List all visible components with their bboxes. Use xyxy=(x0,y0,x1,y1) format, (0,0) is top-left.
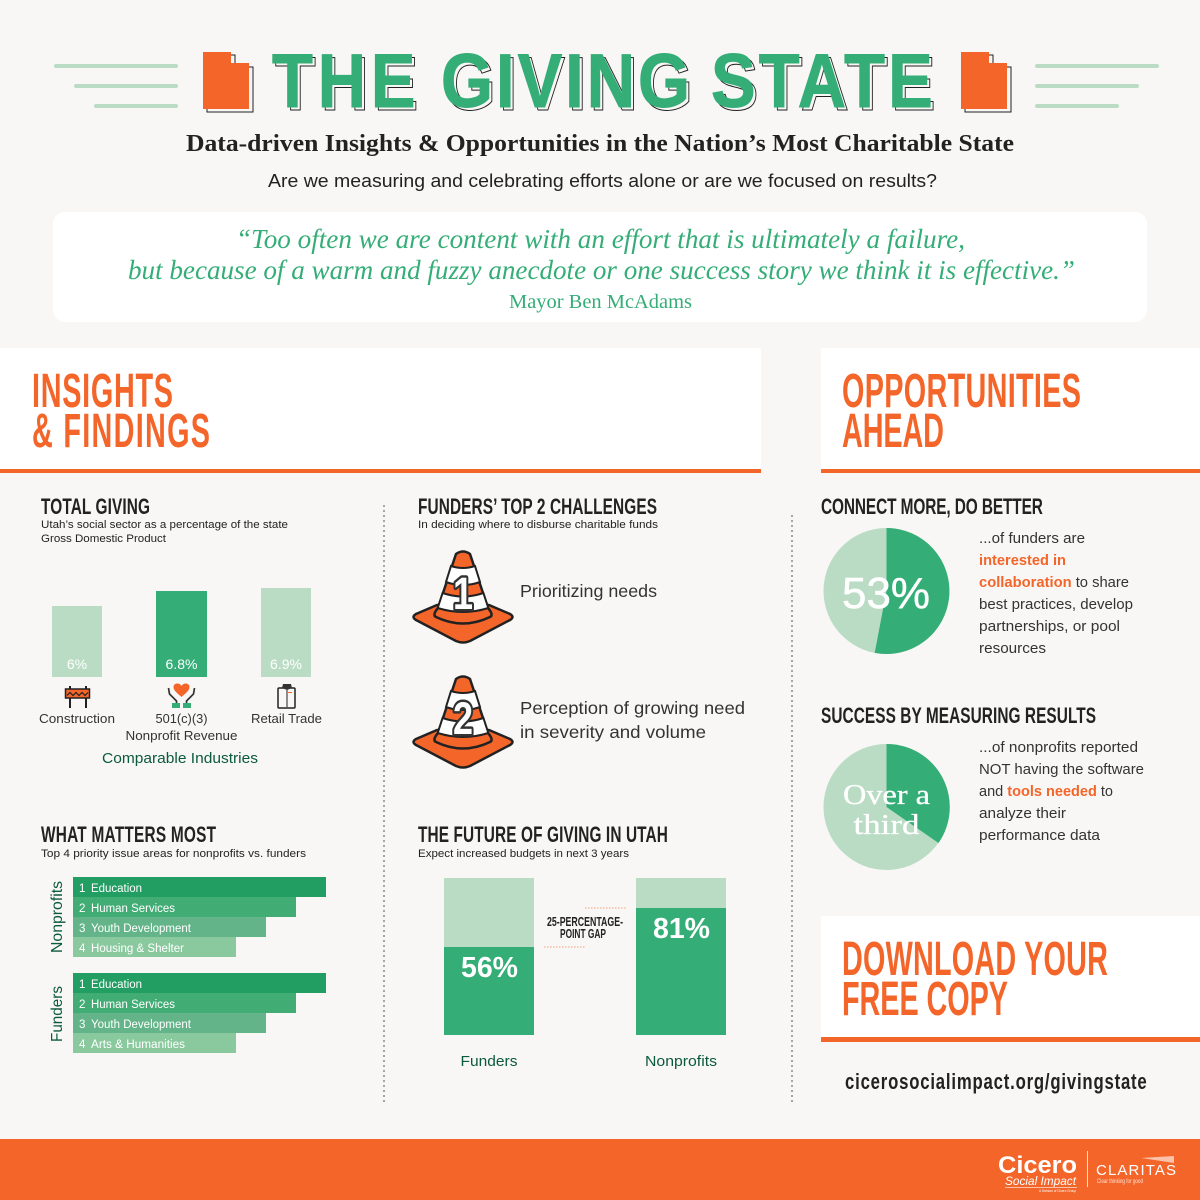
ranked bars: funders: 4 xyxy=(79,1039,86,1051)
icon: traffic cone 2 xyxy=(414,676,512,768)
logo: Claritas: CLARITAS xyxy=(1096,1162,1176,1179)
callout: percentage point gap: POINT GAP xyxy=(560,926,606,941)
icon: Utah state left xyxy=(203,52,253,112)
rotated label: funders: Funders xyxy=(49,986,66,1042)
panel: insights heading xyxy=(0,348,761,473)
panel: download xyxy=(821,916,1200,1095)
bar chart: 6.9% xyxy=(270,656,302,672)
ranked bars: nonprofits xyxy=(73,877,326,957)
heading: download your free copy xyxy=(842,933,1108,1026)
axis labels: Retail Trade xyxy=(251,711,322,726)
ranked bars: nonprofits: 2 xyxy=(79,903,85,915)
title: GIVING xyxy=(441,39,690,124)
ranked bars: funders: Education xyxy=(91,979,142,991)
logo: Cicero Social Impact xyxy=(998,1152,1077,1193)
stacked bar: nonprofits xyxy=(636,878,726,1035)
ranked bars: funders xyxy=(73,973,326,1053)
stacked bar: funders xyxy=(444,878,534,1035)
ranked bars: nonprofits: 4 xyxy=(79,943,86,955)
description text: best practices, develop xyxy=(979,596,1133,613)
axis labels: 501(c)(3) xyxy=(156,711,208,726)
heading: opportunities ahead: AHEAD xyxy=(842,405,944,458)
panel: future of giving xyxy=(418,823,726,1070)
ranked bars: funders: 2 xyxy=(79,999,85,1011)
heading: what matters most: WHAT MATTERS MOST xyxy=(41,823,216,848)
ranked bars: nonprofits: Human Services xyxy=(91,903,175,915)
panel: quote xyxy=(53,212,1147,322)
heading: future of giving: THE FUTURE OF GIVING IN UTAH xyxy=(418,823,668,848)
description text: resources xyxy=(979,640,1046,657)
icon: traffic cone 1: 1 xyxy=(453,568,473,619)
callout: percentage point gap xyxy=(544,908,627,947)
panel: funders' top 2 challenges xyxy=(414,495,745,768)
heading: success: SUCCESS BY MEASURING RESULTS xyxy=(821,704,1096,729)
title: THE xyxy=(275,42,418,127)
bar chart xyxy=(52,588,311,677)
pie chart: over a third: third xyxy=(854,809,920,841)
heading: download your free copy: FREE COPY xyxy=(842,973,1008,1026)
challenge 2 text: in severity and volume xyxy=(520,722,706,742)
header xyxy=(54,39,1159,191)
quote text xyxy=(128,224,1075,285)
heading: insights and findings: & FINDINGS xyxy=(32,405,210,458)
description text: ...of nonprofits reported xyxy=(979,739,1138,756)
stacked bar: nonprofits: 81% xyxy=(653,913,710,945)
description text: and tools needed to xyxy=(979,783,1113,800)
description: Utah’s social sector as a percentage of the state xyxy=(41,519,288,531)
heading: challenges: FUNDERS’ TOP 2 CHALLENGES xyxy=(418,495,657,520)
rotated label: nonprofits: Nonprofits xyxy=(49,881,66,953)
decorative speed lines right xyxy=(1035,64,1159,108)
challenge 2 text xyxy=(520,698,745,742)
bar labels: Funders xyxy=(460,1053,518,1070)
ranked bars: nonprofits: 1 xyxy=(79,883,85,895)
quote attribution: Mayor Ben McAdams xyxy=(509,291,692,313)
heading: opportunities ahead xyxy=(842,365,1081,458)
heading: opportunities ahead: OPPORTUNITIES xyxy=(842,365,1081,418)
ranked bars: funders: Human Services xyxy=(91,999,175,1011)
callout: percentage point gap: 25-PERCENTAGE- xyxy=(547,914,623,929)
ranked bars: funders: 1 xyxy=(79,979,85,991)
description text: performance data xyxy=(979,827,1101,844)
title: THE xyxy=(272,39,415,124)
logo: Cicero Social Impact: Cicero xyxy=(998,1152,1077,1179)
logo: Claritas xyxy=(1096,1156,1176,1185)
description text: ...of funders are xyxy=(979,530,1085,547)
axis labels xyxy=(39,711,322,743)
bar labels xyxy=(460,1053,717,1070)
footer xyxy=(0,1139,1200,1200)
description text: interested in xyxy=(979,552,1066,569)
panel: total giving xyxy=(39,495,322,767)
description: Gross Domestic Product xyxy=(41,533,166,545)
title: GIVING xyxy=(444,42,693,127)
panel: connect more do better xyxy=(821,495,1133,657)
logo: Claritas: Clear thinking for good xyxy=(1097,1179,1143,1185)
heading: total giving: TOTAL GIVING xyxy=(41,495,150,520)
pie chart: over a third xyxy=(824,744,950,870)
panel: opportunities heading xyxy=(821,348,1200,473)
logo: Cicero Social Impact: A Division of Cicero Group xyxy=(1039,1188,1077,1193)
title: STATE xyxy=(711,39,933,124)
icon: retail jacket xyxy=(278,684,295,708)
decorative speed lines left xyxy=(54,64,178,108)
ranked bars: nonprofits: Education xyxy=(91,883,142,895)
panel: success by measuring results xyxy=(821,704,1144,870)
ranked bars: nonprofits: Housing & Shelter xyxy=(91,943,184,955)
icon: hands holding heart xyxy=(168,683,194,708)
pie chart: 53 percent xyxy=(824,528,950,654)
logo: Cicero Social Impact: Social Impact xyxy=(1005,1174,1077,1188)
heading: insights and findings: INSIGHTS xyxy=(32,365,173,418)
title: STATE xyxy=(714,42,936,127)
caption: comparable industries: Comparable Industries xyxy=(102,750,258,767)
description text: analyze their xyxy=(979,805,1066,822)
description text: partnerships, or pool xyxy=(979,618,1120,635)
stacked bar: funders: 56% xyxy=(461,952,518,984)
axis labels: Nonprofit Revenue xyxy=(126,728,238,743)
description xyxy=(41,519,288,545)
description: In deciding where to disburse charitable funds xyxy=(418,519,659,531)
heading: connect more: CONNECT MORE, DO BETTER xyxy=(821,495,1043,520)
quote text: “Too often we are content with an effort that is ultimately a failure, xyxy=(236,224,965,254)
icon: traffic cone 1 xyxy=(414,552,512,642)
pie chart: over a third: Over a xyxy=(843,779,930,811)
challenge 2 text: Perception of growing need xyxy=(520,698,745,718)
pie chart: 53 percent: 53% xyxy=(842,569,930,618)
description text xyxy=(979,530,1133,657)
ranked bars: funders: Youth Development xyxy=(91,1019,192,1031)
bar labels: Nonprofits xyxy=(645,1053,717,1070)
axis labels: Construction xyxy=(39,711,115,726)
description: Top 4 priority issue areas for nonprofits vs. funders xyxy=(41,848,307,860)
ranked bars: nonprofits: Youth Development xyxy=(91,923,192,935)
bar chart: 6% xyxy=(67,656,87,672)
ranked bars: nonprofits: 3 xyxy=(79,923,85,935)
ranked bars: funders: Arts & Humanities xyxy=(91,1039,185,1051)
icon: traffic cone 2: 2 xyxy=(453,693,473,744)
icon: construction barrier xyxy=(66,686,90,708)
heading: insights and findings xyxy=(32,365,210,458)
heading: download your free copy: DOWNLOAD YOUR xyxy=(842,933,1108,986)
bar chart: 6.8% xyxy=(166,656,197,672)
ranked bars: funders: 3 xyxy=(79,1019,85,1031)
question text: Are we measuring and celebrating efforts alone or are we focused on results? xyxy=(268,171,937,191)
download url: cicerosocialimpact.org/givingstate xyxy=(845,1070,1147,1095)
description text: collaboration to share xyxy=(979,574,1129,591)
title xyxy=(272,39,936,127)
description text: NOT having the software xyxy=(979,761,1144,778)
description: Expect increased budgets in next 3 years xyxy=(418,848,630,860)
panel: what matters most xyxy=(41,823,326,1053)
quote text: but because of a warm and fuzzy anecdote or one success story we think it is effective.” xyxy=(128,255,1075,285)
description text xyxy=(979,739,1144,844)
subtitle: Data-driven Insights & Opportunities in the Nation’s Most Charitable State xyxy=(186,131,1014,157)
icon: Utah state right xyxy=(961,52,1011,112)
challenge 1 text: Prioritizing needs xyxy=(520,581,657,601)
